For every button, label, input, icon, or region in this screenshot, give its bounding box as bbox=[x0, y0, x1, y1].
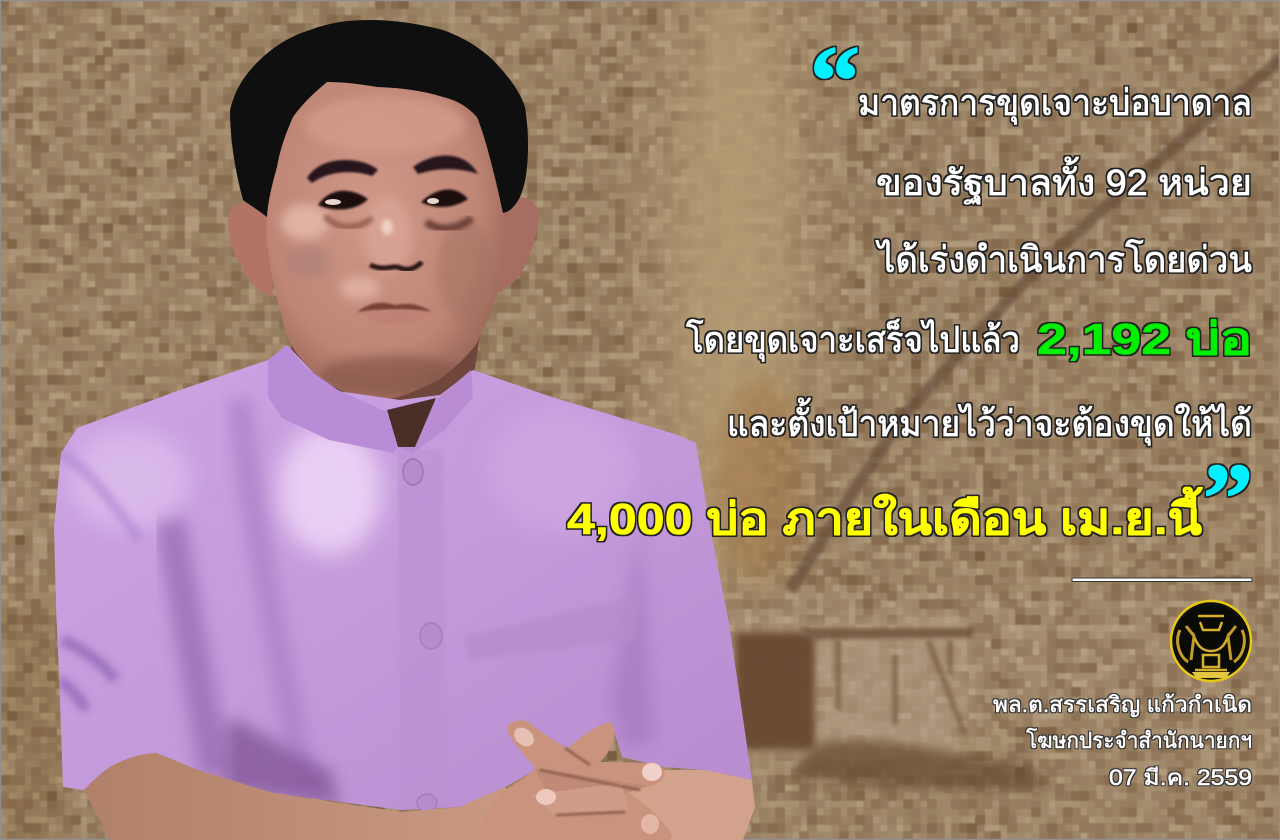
eyes bbox=[318, 191, 368, 210]
green highlight: 2,192 บ่อ bbox=[1037, 315, 1252, 364]
spokesman name: พล.ต.สรรเสริญ แก้วกำเนิด bbox=[993, 692, 1252, 717]
quote line 4: โดยขุดเจาะเสร็จไปแล้ว bbox=[686, 317, 1020, 362]
neck bbox=[290, 335, 480, 452]
opening quote mark: “ bbox=[810, 25, 860, 136]
shirt body bbox=[54, 345, 752, 815]
button top bbox=[403, 459, 423, 485]
spokesman title: โฆษกประจำสำนักนายกฯ bbox=[1026, 728, 1252, 753]
quote text block bbox=[567, 82, 1252, 544]
person: spokesman in lavender shirt bbox=[54, 20, 755, 840]
quote line 5: และตั้งเป้าหมายไว้ว่าจะต้องขุดให้ได้ bbox=[727, 397, 1252, 446]
left forearm bbox=[84, 753, 530, 840]
nose bbox=[370, 262, 422, 269]
icon: government seal bbox=[1171, 601, 1251, 681]
yellow highlight line: 4,000 บ่อ ภายในเดือน เม.ย.นี้ bbox=[567, 486, 1204, 544]
quote line 3: ได้เร่งดำเนินการโดยด่วน bbox=[875, 239, 1252, 280]
ear right bbox=[498, 197, 538, 293]
eyebrows bbox=[307, 160, 378, 183]
quote line 2: ของรัฐบาลทั้ง 92 หน่วย bbox=[876, 156, 1252, 205]
right forearm bbox=[600, 770, 755, 840]
divider line bbox=[1072, 578, 1252, 582]
face bbox=[266, 70, 504, 400]
closing quote mark: ” bbox=[1203, 443, 1253, 554]
button middle bbox=[420, 623, 442, 649]
ear left bbox=[228, 203, 273, 297]
quote line 1: มาตรการขุดเจาะบ่อบาดาล bbox=[858, 82, 1252, 125]
date: 07 มี.ค. 2559 bbox=[1109, 765, 1252, 790]
collar bbox=[268, 345, 398, 453]
button bottom bbox=[417, 794, 437, 812]
hair bbox=[230, 20, 528, 217]
clasped hands bbox=[480, 720, 672, 840]
shirt neck opening bbox=[387, 398, 436, 447]
credit text block bbox=[993, 692, 1252, 790]
mouth bbox=[357, 303, 432, 312]
